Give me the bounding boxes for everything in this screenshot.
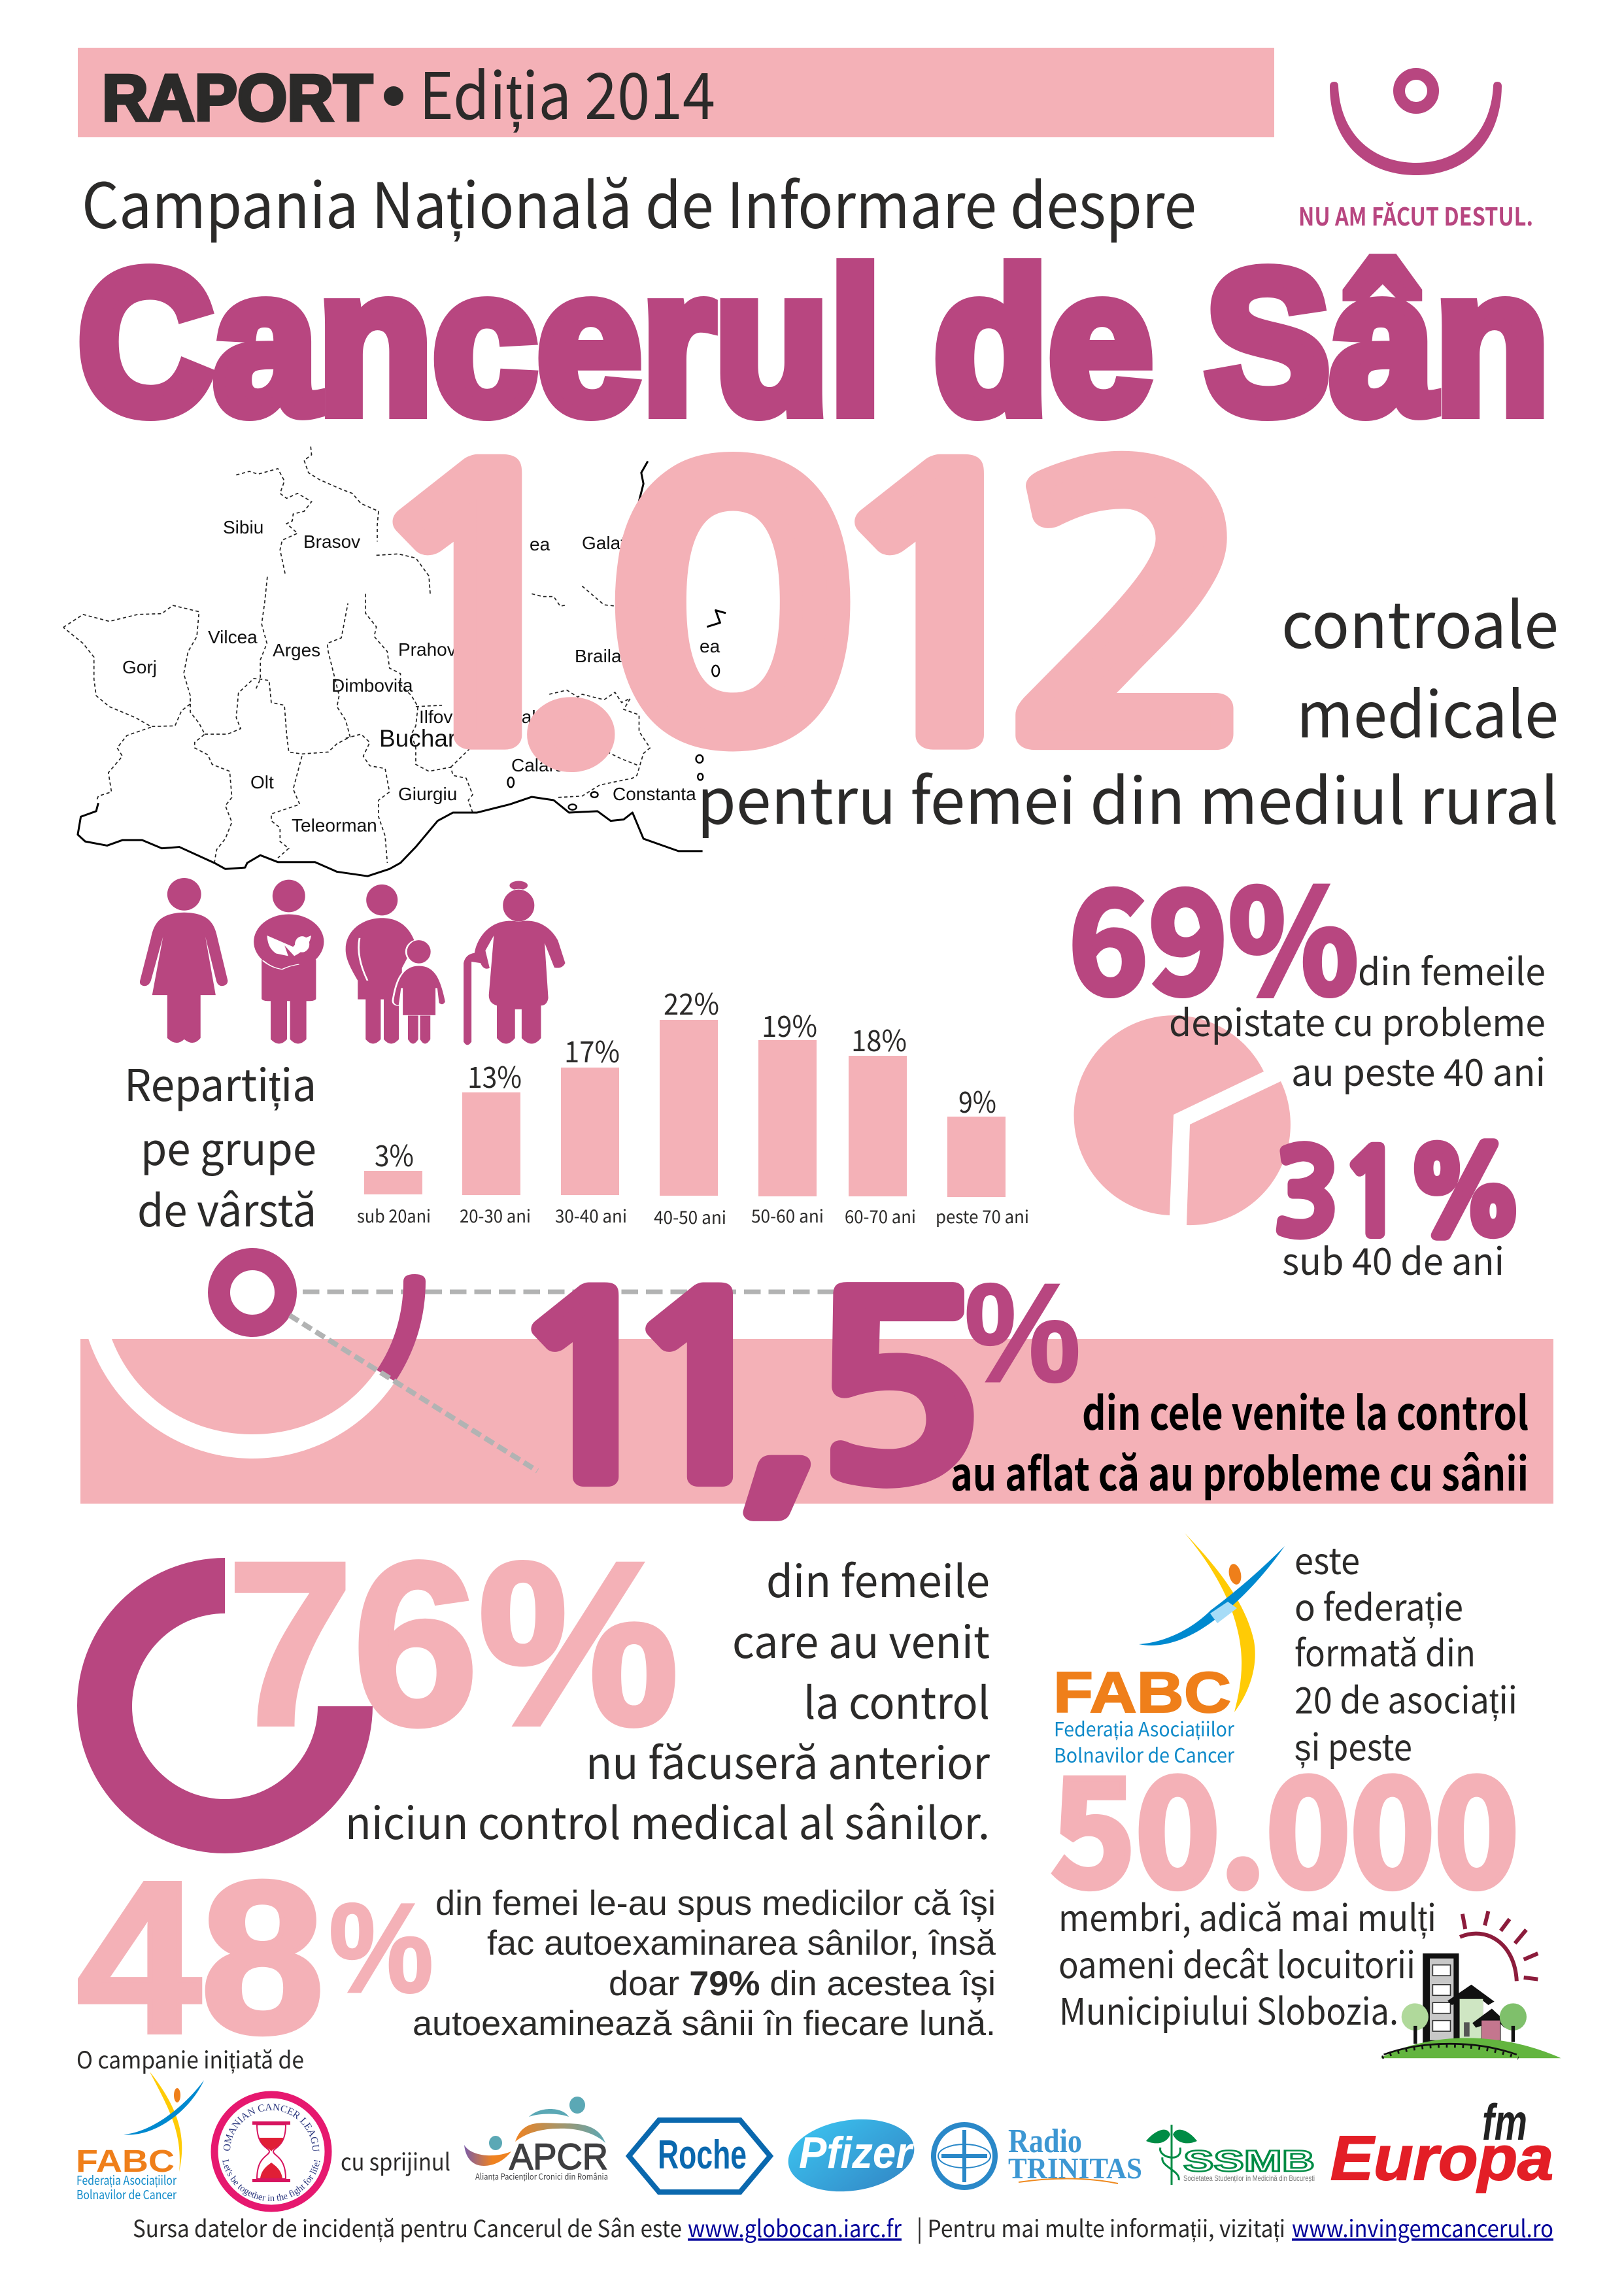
bar chart: age groups: peste 70 ani (936, 1203, 1029, 1228)
map labels: ea (700, 636, 720, 656)
text: din femeile care au venit la control: la control (804, 1668, 990, 1732)
text: din femei le-au spus medicilor (413, 1884, 996, 2043)
logo: Radio Trinitas: Radio (1008, 2123, 1082, 2160)
logo: Radio Trinitas (934, 2123, 1142, 2187)
icon: young woman (140, 878, 228, 1043)
map labels: Vilcea (208, 627, 258, 647)
text: din femei le-au spus medicilor: din femei le-au spus medicilor că își (435, 1884, 996, 1923)
stat: 69%: 69% (1068, 828, 1359, 1035)
text: din femeile depistate cu probleme au peste 40 ani (1169, 943, 1546, 1097)
bar chart: age groups: sub 20ani (357, 1202, 431, 1228)
map labels: Teleorman (292, 815, 377, 835)
stat: 31%: 31% (1274, 1136, 1525, 1252)
text: este o federație formată din 20 de asociații și peste: este (1294, 1532, 1360, 1585)
footer: sources: www.invingemcancerul.ro (1292, 2210, 1553, 2244)
logo: Nu am făcut destul (1298, 74, 1533, 233)
logo: Roche: Roche (658, 2133, 747, 2178)
map labels: Braila (575, 646, 622, 666)
logo: FABC large: FABC (1053, 1660, 1231, 1725)
text: membri, adică mai mulți: Municipiului Slobozia. (1059, 1983, 1398, 2036)
logo: Radio Trinitas: TRINITAS (1008, 2151, 1142, 2185)
logo: APCR: APCR (509, 2136, 608, 2177)
bar chart: age groups: 9% (958, 1079, 996, 1121)
text: din femeile care au venit la control (345, 1547, 990, 1852)
text: membri, adică mai mulți: oameni decât locuitorii (1058, 1936, 1415, 1989)
map labels: Ialomita (516, 707, 581, 727)
bar chart: age groups: 22% (664, 981, 719, 1023)
footer: sources: Sursa datelor de incidență pentru Cancerul de Sân este (133, 2210, 682, 2244)
donut chart: 75% (77, 1558, 373, 1853)
text: este o federație formată din 20 de asociații și peste: și peste (1294, 1719, 1412, 1772)
heading: Repartiția pe grupe de vârstă: Repartiția (124, 1051, 316, 1114)
text: este o federație formată din 20 de asociații și peste: o federație (1294, 1579, 1463, 1632)
stat: 48%: % (329, 1877, 433, 2019)
heading: Repartiția pe grupe de vârstă: pe grupe (141, 1115, 316, 1178)
map labels: Prahova (398, 639, 467, 660)
logo: Pfizer: Pfizer (799, 2128, 914, 2178)
caption: controale medicale pentru femei din mediul rural: controale (1281, 574, 1559, 666)
logo: SSMB (1146, 2125, 1315, 2185)
logo: SSMB: SSMB (1183, 2144, 1315, 2178)
bar chart: age groups: 30-40 ani (555, 1202, 627, 1228)
map labels (122, 517, 720, 835)
logo: Nu am făcut destul: NU AM FĂCUT DESTUL. (1298, 197, 1533, 233)
logo: APCR: Alianța Pacienților Cronici din România (475, 2170, 608, 2182)
map labels: Bucharest (379, 725, 488, 752)
logo: FABC small: FABC (76, 2144, 175, 2179)
map of southern Romania (63, 447, 726, 876)
stat: 11,5%: % (964, 1254, 1081, 1411)
logo: FABC large: Bolnavilor de Cancer (1054, 1740, 1234, 1768)
header band (78, 45, 1274, 138)
stat: 48% (77, 1836, 433, 2078)
footer: sources (133, 2210, 1553, 2244)
bar chart: age groups: 17% (564, 1028, 620, 1071)
logo: FABC large: Federația Asociațiilor (1054, 1713, 1234, 1742)
band: 11,5% (79, 1254, 1553, 1517)
header band: Ediția 2014 (419, 45, 715, 138)
icon: elderly woman with cane (464, 881, 565, 1045)
logo: FABC small: Bolnavilor de Cancer (76, 2185, 177, 2203)
text: din femeile care au venit la control: din femeile (766, 1547, 990, 1610)
text: din cele venite la control au aflat că au probleme cu sânii: din cele venite la control (1082, 1377, 1529, 1443)
map labels: Dimbovita (331, 675, 413, 696)
logo: APCR (464, 2097, 608, 2182)
text: din femeile depistate cu probleme au peste 40 ani: din femeile (1358, 943, 1546, 996)
footer: sources: | Pentru mai multe informații, vizitați (917, 2210, 1285, 2244)
text: din femei le-au spus medicilor: doar 79% din acestea își (609, 1965, 996, 2003)
bar chart: age groups: 13% (467, 1054, 522, 1096)
text: cu sprijinul: cu sprijinul (341, 2144, 450, 2178)
text: din femeile depistate cu probleme au peste 40 ani: depistate cu probleme (1169, 994, 1546, 1047)
text: sub 40 de ani: sub 40 de ani (1282, 1232, 1504, 1286)
map labels: Olt (250, 772, 274, 792)
footer: sources: www.globocan.iarc.fr (688, 2210, 902, 2244)
logo: Roche (629, 2120, 770, 2192)
bar chart: age groups (357, 981, 1029, 1229)
logo: Romanian Cancer League: ROMANIAN CANCER LEAGUE (224, 2104, 319, 2151)
icon: mother with baby (254, 880, 324, 1044)
caption: controale medicale pentru femei din mediul rural: medicale (1296, 664, 1559, 756)
text: din femeile depistate cu probleme au peste 40 ani: au peste 40 ani (1291, 1043, 1546, 1097)
text: este o federație formată din 20 de asociații și peste: 20 de asociații (1294, 1672, 1517, 1725)
heading: Repartiția pe grupe de vârstă (124, 1051, 316, 1240)
logo: FABC small: Federația Asociațiilor (76, 2171, 177, 2189)
header band: RAPORT (102, 61, 373, 135)
heading: Repartiția pe grupe de vârstă: de vârstă (137, 1176, 316, 1240)
stat: 11,5%: 11,5 (501, 1268, 985, 1517)
logo: Pfizer (783, 2112, 919, 2199)
text: O campanie inițiată de: O campanie inițiată de (76, 2042, 304, 2076)
icons: women by age group (140, 878, 565, 1045)
big number 1.012: 1.012 (350, 433, 1260, 793)
text: din femei le-au spus medicilor: fac autoexaminarea sânilor, însă (487, 1924, 996, 1963)
text: din cele venite la control au aflat că au probleme cu sânii (951, 1377, 1529, 1504)
bar chart: age groups: 40-50 ani (654, 1204, 726, 1229)
subtitle: Campania Națională de Informare despre (82, 156, 1196, 246)
text: din femeile care au venit la control: care au venit (732, 1608, 990, 1671)
logo: Europa FM: Europa (1330, 2123, 1553, 2193)
stat: 50.000: 50.000 (1051, 1713, 1519, 1929)
caption: controale medicale pentru femei din mediul rural (697, 574, 1559, 842)
text: din femeile care au venit la control: niciun control medical al sânilor. (345, 1789, 990, 1852)
map labels: ea (530, 534, 550, 554)
text: este o federație formată din 20 de asociații și peste: formată din (1294, 1625, 1476, 1678)
bar chart: age groups: 18% (851, 1017, 907, 1060)
bar chart: age groups: 3% (375, 1132, 414, 1175)
text: membri, adică mai mulți (1058, 1889, 1436, 2036)
bar chart: age groups: 50-60 ani (751, 1202, 824, 1228)
caption: controale medicale pentru femei din mediul rural: pentru femei din mediul rural (697, 750, 1559, 842)
stat: 48%: 48 (77, 1836, 324, 2078)
text: din femei le-au spus medicilor: autoexaminează sânii în fiecare lună. (413, 2004, 996, 2043)
map labels: Sibiu (223, 517, 263, 537)
map labels: Brasov (303, 531, 360, 552)
logo: FABC large (1053, 1533, 1285, 1768)
map labels: Galati (582, 533, 630, 553)
stat: 76%: 76% (228, 1515, 679, 1774)
logo: Romanian Cancer League: Let's be together in the fight for life! (222, 2159, 320, 2201)
map labels: Giurgiu (398, 784, 457, 804)
icon: mother with child (346, 885, 446, 1044)
map labels: si (431, 527, 444, 547)
map labels: Arges (273, 640, 320, 660)
text: membri, adică mai mulți: membri, adică mai mulți (1058, 1889, 1436, 1942)
map labels: Gorj (122, 657, 157, 677)
map labels: Constanta (613, 784, 696, 804)
bar chart: age groups: 19% (762, 1003, 817, 1045)
map labels: Calarasi (511, 755, 579, 775)
logo: Europa FM: fm (1482, 2093, 1527, 2151)
logo: Romanian Cancer League (211, 2091, 332, 2212)
map labels: Ilfov (419, 707, 452, 727)
bar chart: age groups: 60-70 ani (845, 1203, 916, 1228)
logo in band with dashed lines (79, 1259, 835, 1471)
icon: city with sun (1380, 1911, 1561, 2058)
logo: SSMB: Societatea Studenților în Medicină din București (1183, 2174, 1315, 2183)
bar chart: age groups: 20-30 ani (460, 1202, 531, 1228)
pie chart: 69% / 31% (1074, 1015, 1291, 1225)
text: este o federație formată din 20 de asociații și peste (1294, 1532, 1517, 1772)
logo: Europa FM (1330, 2093, 1553, 2193)
text: din femeile care au venit la control: nu făcuseră anterior (586, 1729, 990, 1792)
logo: FABC small (76, 2072, 204, 2203)
